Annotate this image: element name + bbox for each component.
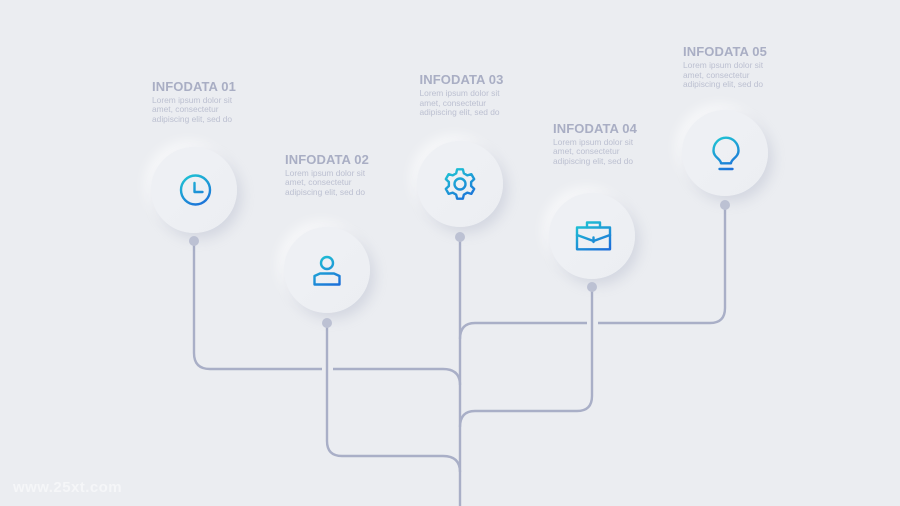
text: infodata 05: [683, 60, 763, 89]
connector dot: [720, 200, 730, 210]
node: infodata 02: [284, 152, 377, 328]
text: infodata 03: [420, 88, 500, 117]
text: infodata 03: adipiscing elit, sed do: [420, 107, 500, 117]
text: infodata 04: amet, consectetur: [553, 146, 620, 156]
text: infodata 05: amet, consectetur: [683, 70, 750, 80]
connector dot: [587, 282, 597, 292]
text: infodata 01: [152, 94, 232, 124]
node: infodata 01: [152, 78, 244, 246]
text: infodata 05: adipiscing elit, sed do: [683, 79, 763, 89]
text: infodata 03: Lorem ipsum dolor sit: [420, 88, 500, 98]
node: infodata 03: [418, 72, 510, 242]
connector dot: [322, 318, 332, 328]
watermark: www.25xt.com: [13, 479, 122, 496]
node: infodata 05: [682, 44, 775, 210]
text: infodata 02: amet, consectetur: [285, 177, 352, 187]
text: infodata 02: [285, 168, 365, 196]
circle with gear icon: [417, 141, 503, 227]
heading: infodata 05: INFODATA 05: [683, 44, 767, 59]
text: infodata 01: amet, consectetur: [152, 104, 219, 114]
circle with person icon: [284, 227, 370, 313]
connector dot: [189, 236, 199, 246]
circle with light bulb icon: [682, 110, 768, 196]
text: infodata 04: [553, 136, 633, 166]
heading: infodata 03: INFODATA 03: [420, 72, 503, 87]
text: infodata 02: adipiscing elit, sed do: [285, 186, 365, 196]
text: infodata 03: amet, consectetur: [420, 98, 486, 108]
text: infodata 04: adipiscing elit, sed do: [553, 156, 633, 166]
heading: infodata 04: INFODATA 04: [553, 120, 637, 136]
text: infodata 01: Lorem ipsum dolor sit: [152, 94, 232, 104]
heading: infodata 01: INFODATA 01: [152, 78, 236, 94]
text: infodata 04: Lorem ipsum dolor sit: [553, 136, 633, 146]
text: infodata 05: Lorem ipsum dolor sit: [683, 60, 763, 70]
circle with briefcase icon: [549, 193, 635, 279]
circle with clock icon: [151, 147, 237, 233]
heading: infodata 02: INFODATA 02: [285, 152, 369, 166]
text: infodata 01: adipiscing elit, sed do: [152, 114, 232, 124]
node: infodata 04: [550, 120, 642, 292]
connector dot: [455, 232, 465, 242]
text: infodata 02: Lorem ipsum dolor sit: [285, 168, 365, 178]
